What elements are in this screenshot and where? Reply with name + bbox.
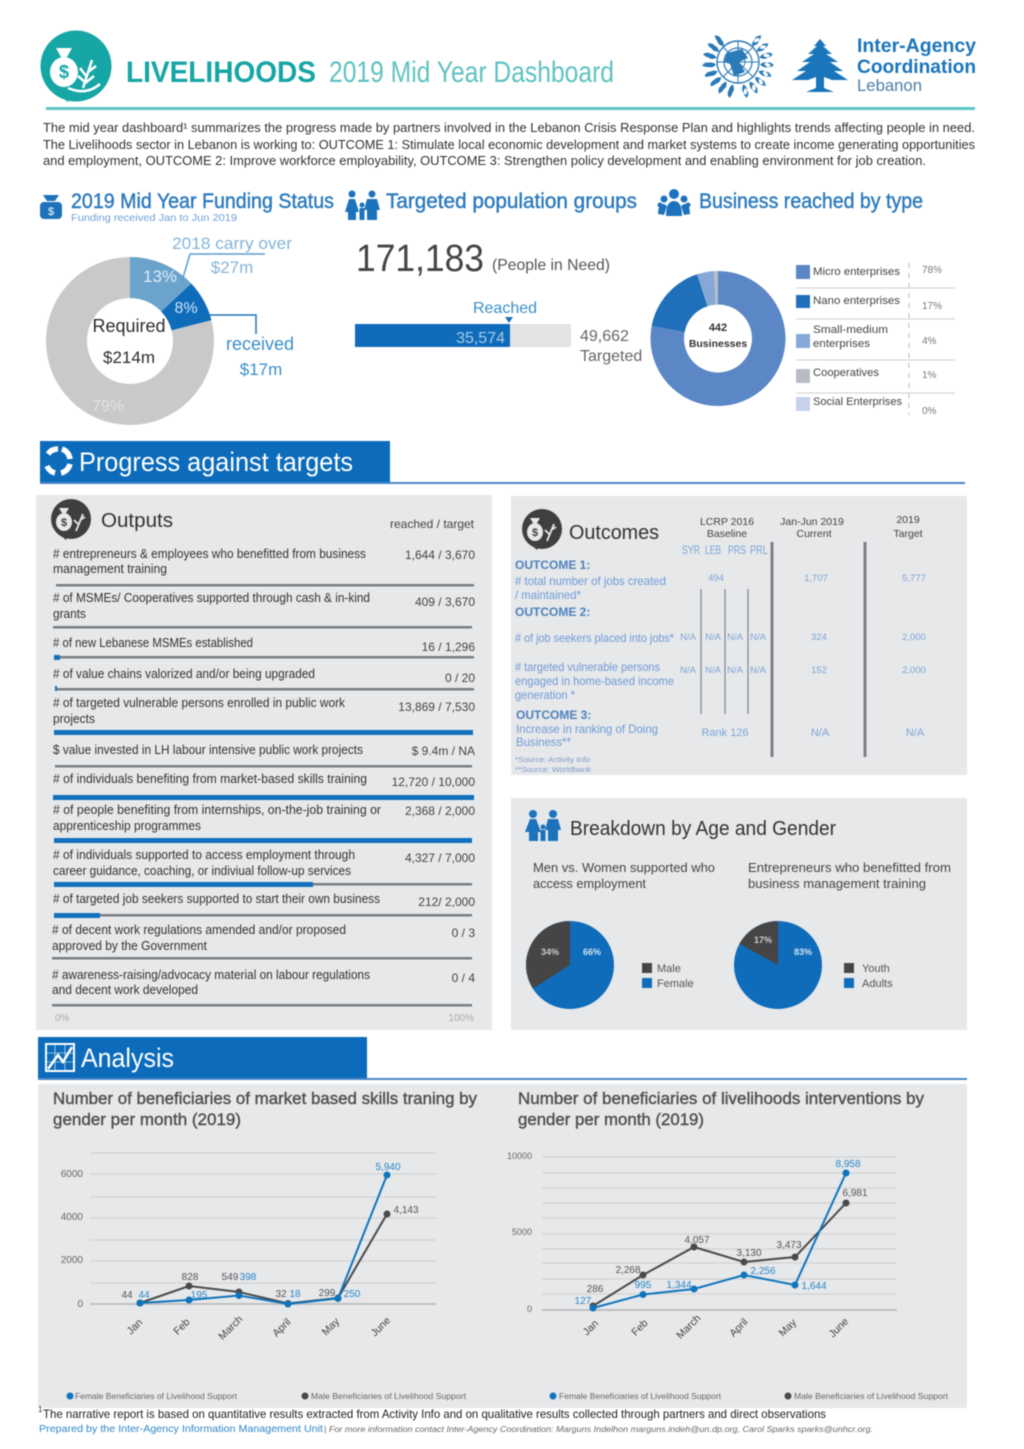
icon: family	[345, 190, 380, 220]
line chart: market based skills training: Feb	[171, 1316, 193, 1338]
line chart: livelihoods interventions: 6,981	[842, 1188, 868, 1199]
line chart: livelihoods interventions: 286	[587, 1284, 604, 1295]
legend: business types	[796, 263, 955, 417]
line chart: livelihoods interventions: April	[727, 1316, 751, 1340]
chart legends: Male Beneficiaries of Livelihood Support	[311, 1392, 467, 1401]
output row 9: career guidance, coaching, or indiviual follow-up services	[53, 864, 351, 878]
panel: targeted population	[345, 190, 642, 365]
panel: outputs	[36, 495, 492, 1030]
line chart: livelihoods interventions: 1,644	[801, 1281, 827, 1292]
output row 10	[53, 892, 475, 918]
line chart: livelihoods interventions: 1,344	[666, 1280, 692, 1291]
outcome 3: Business**	[516, 735, 571, 749]
legend: business types: Small-medium	[813, 324, 888, 336]
line chart: market based skills training: 195	[191, 1290, 208, 1301]
chart title: livelihoods interventions: gender per month (2019)	[518, 1111, 704, 1129]
chart: men vs women: access employment	[533, 876, 646, 891]
line chart: livelihoods interventions: 2,256	[750, 1266, 776, 1277]
logo text: Inter-Agency Coordination Lebanon: Lebanon	[857, 76, 922, 95]
icon: livelihoods emblem	[40, 30, 112, 102]
donut chart: businesses	[651, 271, 786, 406]
panel: outcomes	[511, 496, 967, 775]
output row 3: # of new Lebanese MSMEs established	[53, 636, 253, 650]
chart: entrepreneurs: 83%	[794, 947, 812, 957]
logo text: Inter-Agency Coordination Lebanon: Inter-Agency	[857, 36, 976, 57]
heading: funding status	[71, 190, 334, 224]
output row 1: 1,644 / 3,670	[405, 548, 475, 562]
chart legends: Female Beneficiaries of Livelihood Support	[559, 1392, 722, 1401]
donut chart: funding: 13%	[143, 267, 177, 286]
banner: analysis	[38, 1037, 967, 1080]
heading: funding status: Funding received Jan to Jun 2019	[71, 213, 237, 224]
output row 4: 0 / 20	[445, 671, 475, 685]
people in need figure	[356, 238, 610, 280]
population sub-headers	[682, 545, 768, 557]
callout: 2018 carry over	[172, 234, 292, 281]
output row 5	[53, 696, 475, 735]
chart legends	[66, 1392, 949, 1401]
reached vs targeted bar: Reached	[473, 300, 537, 317]
outcome 2: 324	[811, 632, 827, 643]
intro text: The mid year dashboard¹ summarizes the progress made by partners involved in the Lebanon Crisis Response Plan and highlights trends affecting people in need.	[43, 121, 975, 135]
heading: outputs: Outputs	[101, 510, 173, 532]
output row 7: 12,720 / 10,000	[392, 775, 475, 789]
output row 5: # of targeted vulnerable persons enrolled in public work	[53, 696, 346, 710]
line chart: market based skills training: May	[320, 1315, 343, 1338]
output row 2	[53, 591, 475, 628]
icon: circular arrows	[47, 449, 70, 473]
table headers: 2019	[896, 514, 920, 526]
outcome 2	[515, 605, 926, 702]
logo text: Inter-Agency Coordination Lebanon: Coordination	[857, 57, 976, 78]
reached vs targeted bar: 35,574	[456, 330, 505, 347]
line chart: livelihoods interventions: 3,473	[776, 1240, 802, 1251]
output row 8	[53, 803, 475, 843]
donut chart: funding: Required	[92, 316, 166, 336]
table headers: Jan-Jun 2019	[780, 516, 844, 528]
legend: business types: 1%	[922, 370, 937, 381]
chart legends: Female Beneficiaries of Livelihood Support	[75, 1392, 238, 1401]
line chart: market based skills training: 4000	[61, 1212, 83, 1223]
donut chart: businesses: 442	[709, 322, 727, 334]
people in need figure: (People in Need)	[492, 257, 610, 274]
sources: *Source: Activity Info	[515, 755, 590, 764]
line chart: market based skills training: 4,143	[393, 1205, 419, 1216]
outcome 2: N/A	[727, 665, 744, 676]
output row 4: # of value chains valorized and/or being upgraded	[53, 667, 315, 681]
outcome 2: N/A	[705, 665, 722, 676]
line chart: market based skills training: June	[369, 1314, 393, 1339]
line chart: livelihoods interventions	[507, 1151, 897, 1341]
output row 11: approved by the Government	[52, 939, 208, 953]
icon: livelihoods emblem: $	[59, 62, 69, 82]
credits: Prepared by the Inter-Agency Information Management Unit	[39, 1423, 323, 1435]
chart: men vs women: Male	[657, 963, 681, 975]
line chart: market based skills training: 549	[222, 1272, 239, 1283]
donut chart: funding: 8%	[174, 300, 198, 317]
table headers: Baseline	[707, 528, 747, 540]
population sub-headers: PRS	[728, 545, 746, 557]
outcome 3: Rank 126	[701, 727, 749, 739]
outcome 2: 2,000	[902, 632, 926, 643]
output row 1: # entrepreneurs & employees who benefitted from business	[53, 547, 366, 561]
chart: entrepreneurs: business management training	[748, 876, 926, 891]
panel: funding status	[40, 190, 334, 425]
outcome 2: # of job seekers placed into jobs*	[515, 631, 674, 645]
line chart: livelihoods interventions: 5000	[512, 1227, 532, 1237]
sources	[515, 755, 591, 774]
icon: group of people	[658, 189, 690, 216]
heading: targeted population: Targeted population groups	[386, 190, 637, 213]
chart: men vs women: Men vs. Women supported who	[533, 860, 715, 875]
donut chart: businesses: Businesses	[689, 338, 747, 350]
panel: business reached	[651, 189, 955, 417]
outcome 2: N/A	[680, 665, 697, 676]
intro text: and employment, OUTCOME 2: Improve workforce employability, OUTCOME 3: Strengthen policy development and enabling environment for job creation.	[43, 154, 926, 168]
line chart: market based skills training: 6000	[61, 1169, 83, 1180]
donut chart: funding: $214m	[103, 348, 155, 367]
legend: business types: Social Enterprises	[813, 396, 902, 408]
output row 9: # of individuals supported to access employment through	[53, 848, 355, 862]
chart: entrepreneurs: 17%	[754, 935, 772, 945]
panel: breakdown by age and gender	[511, 798, 967, 1030]
line chart: market based skills training: Jan	[125, 1317, 145, 1337]
progress scale	[55, 1013, 474, 1024]
chart title: market based skills training	[53, 1090, 478, 1129]
chart: men vs women: 66%	[583, 947, 601, 957]
callout: received: $17m	[240, 360, 282, 379]
heading: breakdown: Breakdown by Age and Gender	[570, 818, 836, 840]
heading: outcomes: Outcomes	[569, 522, 659, 544]
heading: funding status: 2019 Mid Year Funding Status	[71, 190, 334, 213]
heading: progress against targets: Progress against targets	[79, 447, 353, 477]
credits: | For more information contact Inter-Agency Coordination: Marguns Indelhon marguns.indeh@un.dp.org, Carol Sparks sparks@unhcr.org.	[324, 1424, 873, 1434]
column header: reached / target	[390, 517, 475, 531]
icon: cedar	[792, 39, 848, 92]
line chart: market based skills training: 250	[344, 1289, 361, 1300]
output row 5: projects	[53, 712, 95, 726]
output row 10: 212/ 2,000	[418, 895, 475, 909]
outcome 2: engaged in home-based income	[515, 674, 674, 688]
outcome 1	[515, 558, 926, 602]
reached vs targeted bar: Targeted	[580, 348, 642, 365]
icon: money bag	[40, 195, 62, 219]
progress scale: 0%	[55, 1013, 70, 1024]
line chart: livelihoods interventions: 2,268	[615, 1265, 641, 1276]
line chart: market based skills training: April	[270, 1316, 294, 1340]
line chart: market based skills training: 44	[138, 1290, 150, 1301]
population sub-headers: SYR	[682, 545, 700, 557]
line chart: livelihoods interventions: May	[777, 1316, 800, 1339]
outcome 2: 152	[811, 665, 827, 676]
output row 7: # of individuals benefiting from market-based skills training	[53, 772, 367, 786]
icon: outcomes emblem	[522, 509, 562, 550]
legend: business types: 4%	[922, 336, 937, 347]
people in need figure: 171,183	[356, 238, 484, 280]
output row 2: # of MSMEs/ Cooperatives supported through cash & in-kind	[53, 591, 370, 605]
population sub-headers: PRL	[750, 545, 768, 557]
chart title: livelihoods interventions: Number of beneficiaries of livelihoods interventions by	[518, 1090, 925, 1108]
output row 12	[52, 968, 475, 1006]
output row 11: # of decent work regulations amended and/or proposed	[52, 923, 346, 937]
outcome 1: OUTCOME 1:	[515, 558, 590, 572]
line chart: market based skills training: 44	[121, 1290, 133, 1301]
chart title: market based skills training: Number of beneficiaries of market based skills traning by	[53, 1090, 478, 1108]
outcome 1: / maintained*	[515, 588, 581, 602]
output row 12: # awareness-raising/advocacy material on labour regulations	[52, 968, 370, 982]
legend: business types: Cooperatives	[813, 367, 879, 379]
outcome 3: OUTCOME 3:	[516, 708, 591, 722]
line chart: livelihoods interventions: 3,130	[736, 1248, 762, 1259]
legend: business types: 78%	[922, 265, 942, 276]
outcome 2: N/A	[727, 632, 744, 643]
output row 11	[52, 923, 475, 960]
output row 10: # of targeted job seekers supported to start their own business	[53, 892, 380, 906]
output row 2: grants	[53, 607, 86, 621]
line chart: market based skills training: 2000	[61, 1255, 83, 1266]
output row 12: and decent work developed	[52, 983, 198, 997]
output row 1: management training	[53, 562, 167, 576]
chart: entrepreneurs: Youth	[862, 963, 890, 975]
population sub-headers: LEB	[705, 545, 721, 557]
icon: outcomes emblem: $	[532, 527, 538, 539]
output row 3	[53, 636, 475, 660]
line chart: livelihoods interventions: 8,958	[835, 1159, 861, 1170]
banner: progress against targets	[40, 441, 965, 484]
table headers: Current	[796, 528, 832, 540]
chart title: livelihoods interventions	[518, 1090, 925, 1129]
outcome 1: 5,777	[902, 573, 926, 584]
output row 9: 4,327 / 7,000	[405, 851, 475, 865]
icon: line chart	[46, 1044, 74, 1071]
callout: 2018 carry over: $27m	[211, 258, 253, 277]
outcome 2: # targeted vulnerable persons	[515, 660, 660, 674]
outcome 2: N/A	[750, 632, 767, 643]
line chart: livelihoods interventions: June	[827, 1315, 851, 1340]
line chart: livelihoods interventions: March	[674, 1312, 704, 1341]
donut chart: funding: 79%	[92, 398, 124, 415]
line chart: market based skills training: 398	[240, 1272, 257, 1283]
line chart: market based skills training: 32	[275, 1289, 287, 1300]
icon: UN emblem	[702, 34, 774, 99]
reached vs targeted bar: 49,662	[580, 328, 629, 345]
outcome 2: OUTCOME 2:	[515, 605, 590, 619]
reached vs targeted bar	[355, 300, 642, 365]
line chart: livelihoods interventions: 10000	[507, 1151, 532, 1161]
output row 8: 2,368 / 2,000	[405, 804, 475, 818]
output row 6: $ 9.4m / NA	[412, 744, 475, 758]
outcome 1: 1,707	[804, 573, 828, 584]
output row 6: $ value invested in LH labour intensive public work projects	[53, 743, 363, 757]
line chart: market based skills training: 0	[77, 1299, 83, 1310]
callout: received: received	[226, 334, 294, 354]
title	[126, 56, 614, 89]
chart: men vs women: Female	[657, 978, 694, 990]
output row 3: 16 / 1,296	[422, 640, 475, 654]
icon: money bag: $	[48, 206, 54, 218]
outcome 3: N/A	[906, 727, 925, 739]
heading: analysis: Analysis	[81, 1043, 174, 1073]
legend: business types: enterprises	[813, 338, 871, 350]
line chart: market based skills training: 5,940	[375, 1162, 401, 1173]
title: 2019 Mid Year Dashboard	[329, 56, 614, 89]
line chart: livelihoods interventions: 995	[635, 1280, 652, 1291]
outcome 3: N/A	[811, 727, 830, 739]
outcome 2: 2,000	[902, 665, 926, 676]
line chart: livelihoods interventions: 127	[575, 1296, 592, 1307]
outcome 2: N/A	[750, 665, 767, 676]
outcome 1: # total number of jobs created	[515, 574, 666, 588]
outcome 3: Increase in ranking of Doing	[516, 722, 658, 736]
table headers: LCRP 2016	[700, 516, 754, 528]
legend: business types: 17%	[922, 301, 942, 312]
output row 8: # of people benefiting from internships, on-the-job training or	[53, 803, 381, 817]
sources: **Source: Worldbank	[515, 765, 591, 774]
intro text: The Livelihoods sector in Lebanon is working to: OUTCOME 1: Stimulate local economic development and market systems to create income generating opportunities	[43, 138, 975, 152]
line chart: livelihoods interventions: Feb	[629, 1317, 651, 1339]
line chart: market based skills training: 828	[182, 1272, 199, 1283]
output row 7	[53, 772, 475, 800]
output row 5: 13,869 / 7,530	[398, 700, 475, 714]
logo text: Inter-Agency Coordination Lebanon	[857, 36, 976, 95]
table grid	[701, 542, 865, 757]
output row 6	[53, 743, 475, 768]
outcome 1: 494	[708, 573, 724, 584]
line chart: market based skills training	[61, 1153, 436, 1342]
panel: analysis	[38, 1084, 967, 1408]
icon: family	[525, 810, 561, 841]
line chart: market based skills training: March	[216, 1313, 246, 1342]
line chart: livelihoods interventions: 4,057	[684, 1235, 710, 1246]
title: LIVELIHOODS	[126, 56, 316, 89]
chart: entrepreneurs: Entrepreneurs who benefitted from	[748, 860, 951, 875]
table headers	[700, 514, 923, 540]
chart: men vs women	[526, 860, 715, 1009]
line chart: market based skills training: 299	[319, 1288, 336, 1299]
intro text	[43, 121, 975, 168]
header	[40, 30, 976, 102]
icon: outputs emblem	[51, 499, 91, 540]
footnote: The narrative report is based on quantitative results extracted from Activity Info and on qualitative results collected through partners and direct observations	[43, 1407, 826, 1421]
donut chart: funding	[46, 257, 214, 425]
output row 11: 0 / 3	[452, 926, 475, 940]
output row 4	[53, 667, 475, 691]
line chart: livelihoods interventions: 0	[527, 1304, 532, 1314]
outcome 2: N/A	[680, 632, 697, 643]
progress scale: 100%	[448, 1013, 474, 1024]
table headers: Target	[893, 528, 923, 540]
outcome 2: generation *	[515, 688, 575, 702]
output row 8: apprenticeship programmes	[53, 819, 201, 833]
line chart: market based skills training: 18	[289, 1289, 301, 1300]
output row 9	[53, 848, 475, 887]
line chart: livelihoods interventions: Jan	[581, 1318, 601, 1338]
legend: business types: 0%	[922, 406, 937, 417]
outcome 2: N/A	[705, 632, 722, 643]
chart title: market based skills training: gender per month (2019)	[53, 1111, 241, 1129]
legend: business types: Micro enterprises	[813, 266, 901, 278]
output row 1	[53, 547, 475, 586]
callout: 2018 carry over: 2018 carry over	[172, 234, 292, 253]
callout: received	[209, 315, 294, 379]
output row 2: 409 / 3,670	[415, 595, 475, 609]
output row 12: 0 / 4	[452, 971, 475, 985]
chart: entrepreneurs: Adults	[862, 978, 893, 990]
footnote: 1	[38, 1405, 43, 1414]
chart: men vs women: 34%	[541, 947, 559, 957]
chart: entrepreneurs	[734, 860, 951, 1009]
heading: business reached: Business reached by type	[699, 190, 923, 213]
outcome 3	[516, 708, 925, 749]
legend: business types: Nano enterprises	[813, 295, 901, 307]
icon: outputs emblem: $	[61, 517, 67, 529]
credits	[39, 1423, 873, 1435]
chart legends: Male Beneficiaries of Livelihood Support	[794, 1392, 949, 1401]
